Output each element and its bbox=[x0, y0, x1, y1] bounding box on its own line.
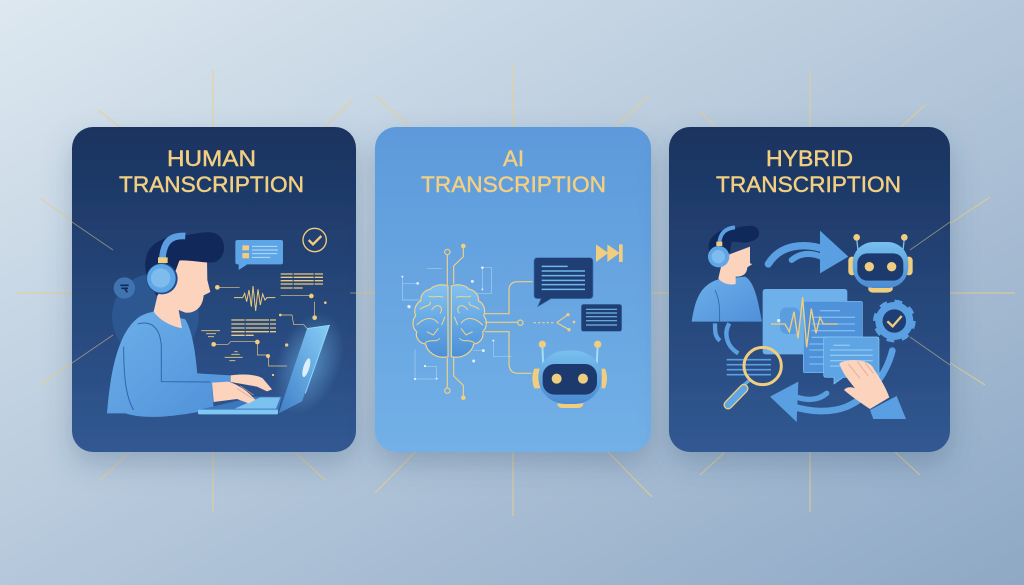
laptop bbox=[198, 302, 357, 424]
ai card background bbox=[375, 127, 651, 452]
chat bubble bbox=[235, 240, 283, 270]
person bbox=[692, 226, 762, 353]
person torso bbox=[107, 312, 231, 417]
neck and face bbox=[154, 257, 210, 328]
panel: human transcription bbox=[72, 127, 357, 452]
human rays over card bbox=[72, 222, 356, 363]
hand bbox=[839, 360, 906, 419]
human card background bbox=[72, 127, 356, 452]
hybrid illustration bbox=[692, 226, 913, 422]
reply card bbox=[824, 337, 879, 384]
small document bbox=[581, 304, 622, 331]
waveform document bbox=[763, 289, 862, 373]
small badge icon bbox=[114, 277, 135, 299]
speech bubble large bbox=[534, 258, 593, 307]
ai heading: AI bbox=[503, 146, 524, 171]
hybrid heading: TRANSCRIPTION bbox=[716, 172, 901, 197]
panel: ai transcription bbox=[375, 127, 651, 452]
cycle arrow top bbox=[768, 231, 848, 273]
gear check bbox=[876, 302, 913, 340]
panel: hybrid transcription bbox=[669, 127, 950, 452]
decorative rays bbox=[15, 65, 1015, 516]
sleeve seams bbox=[124, 323, 210, 410]
faint circuit lines bbox=[401, 266, 512, 380]
cycle arrow bottom bbox=[770, 351, 892, 422]
check badge bbox=[303, 228, 326, 252]
human illustration bbox=[107, 228, 357, 424]
fast forward icon bbox=[596, 244, 623, 262]
hybrid card background bbox=[669, 127, 950, 452]
headphones bbox=[146, 236, 185, 294]
ai illustration bbox=[401, 244, 623, 408]
hands bbox=[231, 375, 272, 391]
human heading: HUMAN bbox=[167, 146, 256, 171]
hair bbox=[145, 232, 224, 296]
backdrop circle bbox=[112, 273, 199, 360]
brain circuit traces bbox=[445, 244, 575, 400]
ai heading: TRANSCRIPTION bbox=[421, 172, 606, 197]
hybrid heading: HYBRID bbox=[766, 146, 853, 171]
text lines, waveform and circuit traces bbox=[201, 274, 327, 376]
hybrid rays over card bbox=[910, 222, 950, 365]
human heading: TRANSCRIPTION bbox=[119, 172, 304, 197]
magnifier bbox=[722, 347, 781, 410]
robot bbox=[848, 234, 913, 293]
robot bbox=[532, 341, 607, 408]
brain bbox=[413, 285, 486, 357]
